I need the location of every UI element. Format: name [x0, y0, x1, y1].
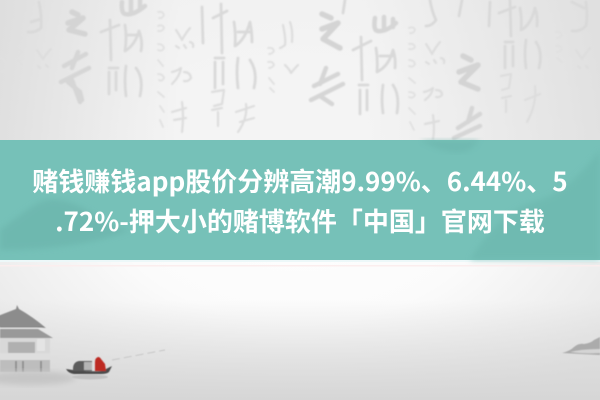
teal banner	[0, 140, 600, 260]
hall	[0, 338, 50, 358]
pavilion	[0, 305, 53, 372]
thin script columns	[28, 0, 587, 114]
title: .72%-押大小的赌博软件「中国」官网下载	[55, 202, 545, 239]
title: 赌钱赚钱app股价分辨高潮9.99%、6.44%、5	[32, 162, 568, 199]
banner edge lines	[0, 260, 600, 262]
mist below pavilion	[0, 371, 76, 385]
calligraphy watermark	[0, 0, 590, 139]
small grass-script columns	[0, 12, 562, 130]
boat	[66, 350, 165, 380]
boatman in red	[95, 357, 106, 371]
title	[32, 162, 568, 239]
bold characters	[68, 12, 478, 89]
fine characters	[37, 22, 590, 139]
distant island	[562, 337, 600, 355]
roof	[0, 305, 46, 328]
